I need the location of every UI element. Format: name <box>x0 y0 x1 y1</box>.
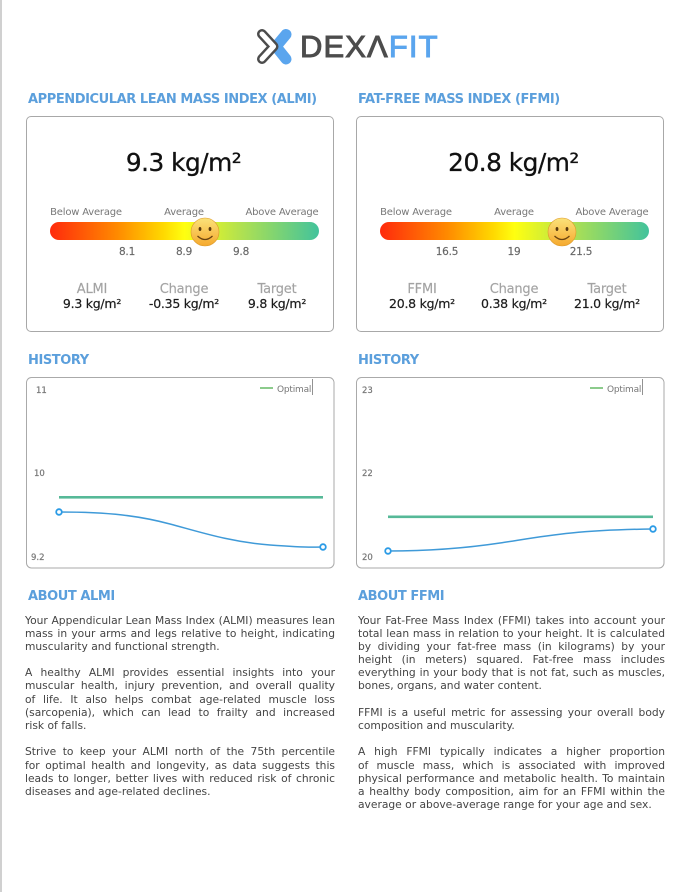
text block: About FFMI: composition and muscularity. <box>358 719 515 732</box>
text block: About ALMI: Strive to keep your ALMI north of the 75th percentile <box>25 745 335 758</box>
chart: FFMI history: 20 <box>362 553 373 563</box>
FFMI gauge labels: Below Average <box>380 207 452 218</box>
icon: ALMI smiley marker <box>190 218 220 246</box>
ALMI stats <box>63 282 306 311</box>
text block: About ALMI: leads to longer, better lives with reduced risk of chronic <box>25 772 335 785</box>
FFMI gauge labels: Above Average <box>575 207 649 218</box>
FFMI stats: 0.38 kg/m² <box>481 296 547 310</box>
text block: About FFMI: average or above-average range for your age and sex. <box>358 798 652 811</box>
chart: ALMI history: Optimal <box>277 385 311 395</box>
panel: ALMI summary <box>26 116 334 332</box>
ALMI gauge values: 8.9 <box>176 246 192 258</box>
text block: About FFMI: a healthy body composition, aim for an FFMI within the <box>358 785 665 798</box>
text block: About ALMI: diseases and age-related declines. <box>25 785 211 798</box>
text block: About ALMI: A healthy ALMI provides essential insights into your <box>25 666 335 679</box>
text block: About FFMI: total lean mass in relation to your height. It is calculated <box>358 627 665 640</box>
FFMI stats: Target <box>587 282 627 297</box>
chart: FFMI history: 22 <box>362 469 373 479</box>
FFMI value: 20.8 kg/m² <box>448 148 579 177</box>
chart: ALMI history: 9.2 <box>31 553 45 563</box>
text block: About FFMI: everything in your body that is not fat, such as muscles, <box>358 666 665 679</box>
text block: About FFMI: height (in meters) squared. Fat-free mass includes <box>358 653 665 666</box>
FFMI stats: 20.8 kg/m² <box>389 296 455 310</box>
text block: About FFMI: A high FFMI typically indicates a higher proportion <box>358 745 665 758</box>
ALMI value: 9.3 kg/m² <box>126 148 241 177</box>
text block: About FFMI: by dividing your fat-free mass (in kilograms) by your <box>358 640 665 653</box>
chart: FFMI history: Optimal <box>607 385 641 395</box>
FFMI gauge values: 16.5 <box>436 246 458 258</box>
icon: FFMI smiley marker <box>548 218 576 246</box>
text block: About FFMI: physical performance and metabolic health. To maintain <box>358 772 665 785</box>
FFMI gauge bar <box>380 222 649 240</box>
FFMI gauge labels <box>380 207 649 218</box>
ALMI gauge labels: Above Average <box>245 207 319 218</box>
ALMI stats: 9.8 kg/m² <box>248 296 306 310</box>
FFMI gauge values <box>436 246 592 258</box>
text block: About ALMI: of life. It also helps combat age-related muscle loss <box>25 693 335 706</box>
chart: ALMI history <box>26 377 334 568</box>
heading: ALMI: APPENDICULAR LEAN MASS INDEX (ALMI) <box>28 92 317 107</box>
text block: About FFMI: of muscle mass, which is associated with improved <box>358 759 665 772</box>
ALMI stats: 9.3 kg/m² <box>63 296 121 310</box>
text block: About FFMI: bones, organs, and water content. <box>358 679 542 692</box>
ALMI stats: -0.35 kg/m² <box>149 296 219 310</box>
text block: About ALMI: mass in your arms and legs relative to height, indicating <box>25 627 335 640</box>
chart: ALMI history: 11 <box>36 386 47 396</box>
FFMI stats <box>389 282 640 311</box>
text block: About FFMI: Your Fat-Free Mass Index (FFMI) takes into account your <box>358 614 665 626</box>
FFMI gauge labels: Average <box>494 207 534 218</box>
text block: About ALMI: Your Appendicular Lean Mass Index (ALMI) measures lean <box>25 614 335 626</box>
text block: About ALMI: (sarcopenia), which can lead to frailty and increased <box>25 706 335 719</box>
heading: FFMI: FAT-FREE MASS INDEX (FFMI) <box>358 92 560 107</box>
text block: About FFMI <box>358 614 665 811</box>
heading: About ALMI: ABOUT ALMI <box>28 589 115 604</box>
ALMI gauge values: 9.8 <box>233 246 249 258</box>
ALMI gauge labels <box>50 207 319 218</box>
page edge <box>0 0 2 892</box>
text block: About ALMI: risk of falls. <box>25 719 86 732</box>
ALMI gauge labels: Average <box>164 207 204 218</box>
panel: FFMI summary <box>356 116 664 332</box>
chart: FFMI history: 23 <box>362 386 373 396</box>
text block: About ALMI: muscular health, injury prevention, and overall quality <box>25 679 335 692</box>
text block: About ALMI: muscularity and functional strength. <box>25 640 220 653</box>
logo: DexaFit <box>257 29 439 64</box>
FFMI stats: Change <box>490 282 538 297</box>
ALMI gauge values <box>119 246 249 258</box>
heading: FFMI history: HISTORY <box>358 353 419 368</box>
FFMI stats: FFMI <box>407 282 437 297</box>
ALMI gauge values: 8.1 <box>119 246 135 258</box>
heading: ALMI history: HISTORY <box>28 353 89 368</box>
ALMI stats: ALMI <box>77 282 107 297</box>
ALMI stats: Change <box>160 282 208 297</box>
heading: About FFMI: ABOUT FFMI <box>358 589 444 604</box>
FFMI stats: 21.0 kg/m² <box>574 296 640 310</box>
chart: FFMI history <box>356 377 664 568</box>
FFMI gauge values: 19 <box>508 246 520 258</box>
text block: About FFMI: FFMI is a useful metric for assessing your overall body <box>358 706 665 719</box>
ALMI stats: Target <box>257 282 297 297</box>
FFMI gauge values: 21.5 <box>570 246 592 258</box>
text block: About ALMI: for optimal health and longevity, as data suggests this <box>25 759 335 772</box>
text block: About ALMI <box>25 614 335 798</box>
logo wordmark: DEXΛFIT <box>300 29 439 64</box>
icon: logo mark <box>257 29 292 64</box>
chart: ALMI history: 10 <box>34 469 45 479</box>
ALMI gauge bar <box>50 222 319 240</box>
ALMI gauge labels: Below Average <box>50 207 122 218</box>
